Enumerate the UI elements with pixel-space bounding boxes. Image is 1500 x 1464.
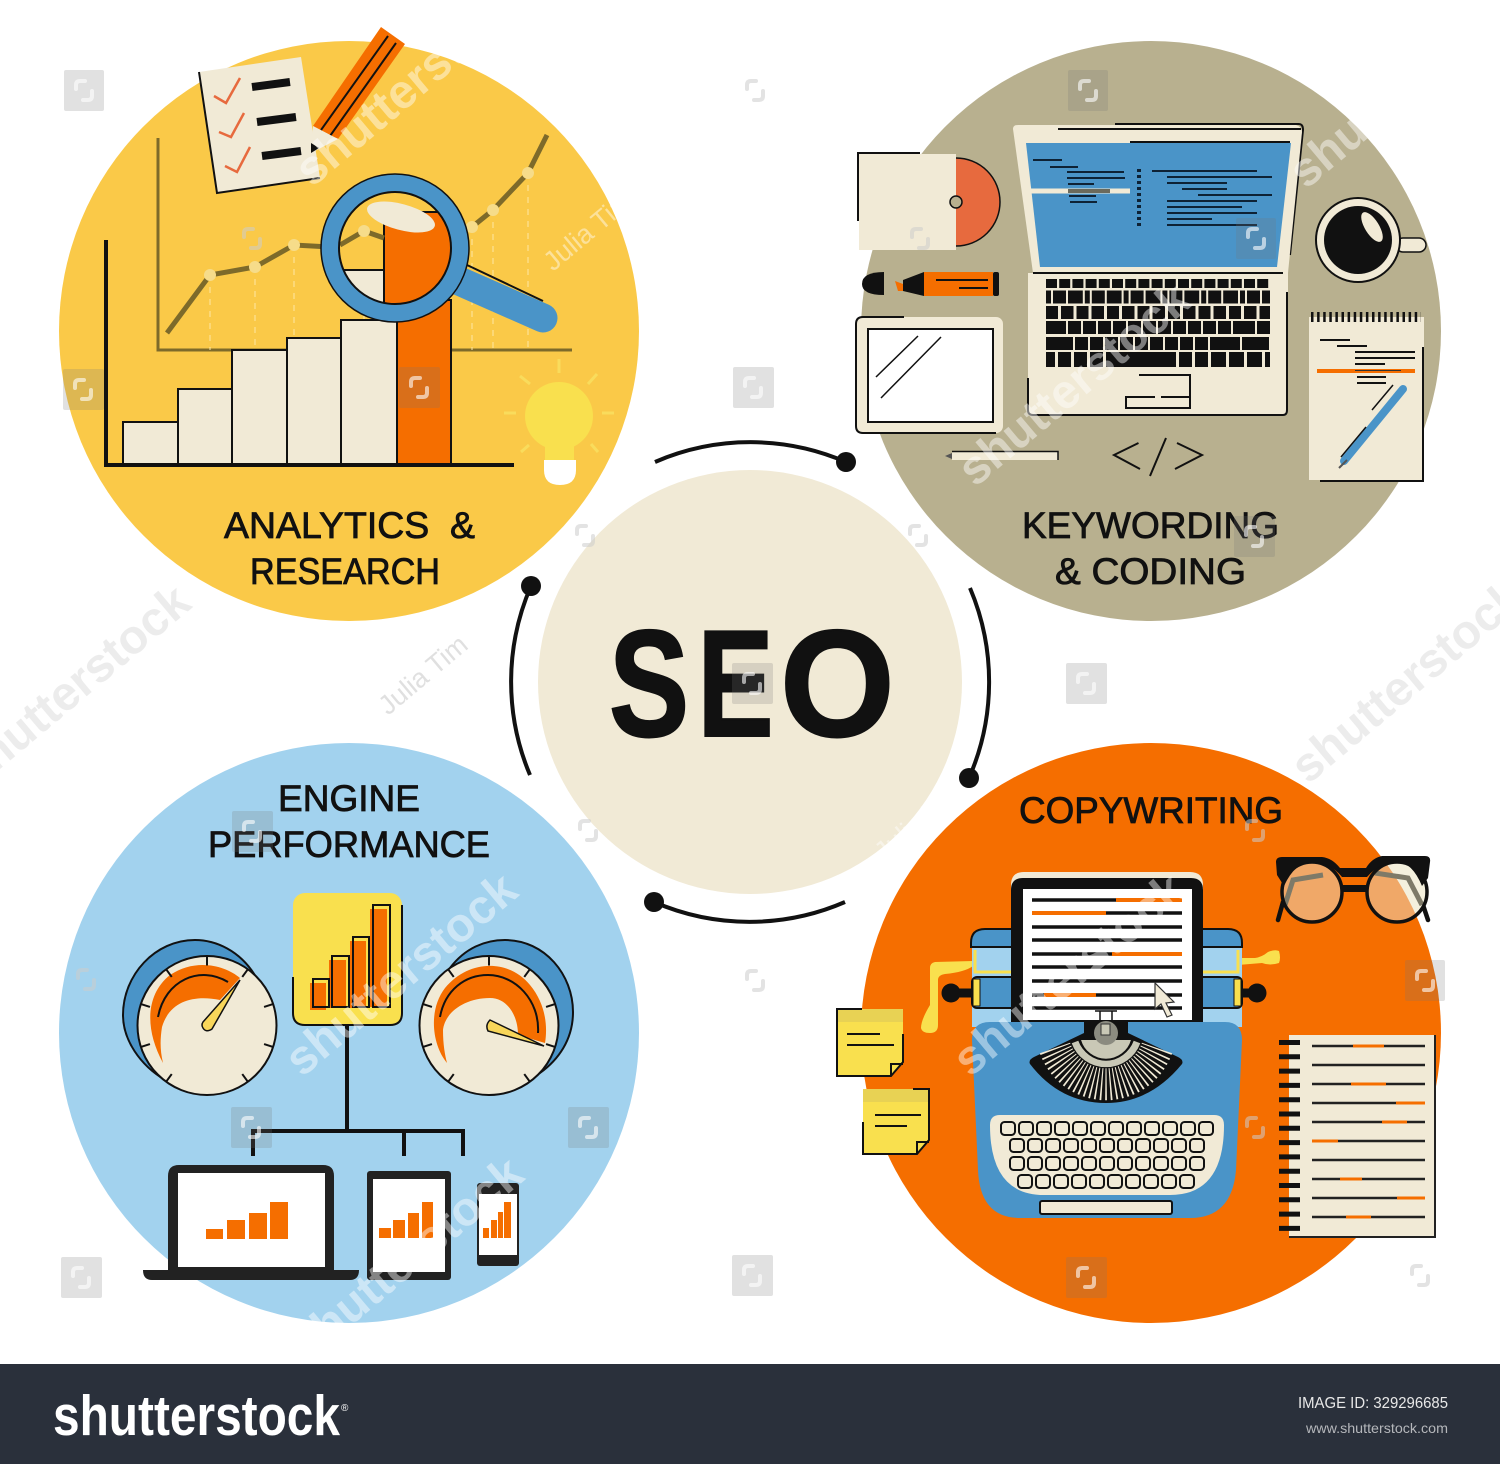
tablet <box>856 317 1003 433</box>
code symbol <box>1114 438 1202 476</box>
panel: analytics and research <box>59 27 639 621</box>
code lines <box>1030 160 1272 228</box>
footer url: www.shutterstock.com <box>1305 1420 1448 1436</box>
coffee cup <box>1316 198 1426 282</box>
tablet with bars <box>367 1171 451 1280</box>
footer logo: shutterstock <box>53 1384 340 1448</box>
watermark text: shutterstock <box>275 862 528 1086</box>
phone with bars <box>477 1183 519 1266</box>
watermark text: shutterstock <box>943 862 1196 1086</box>
notebook <box>1289 1035 1435 1237</box>
watermark text: shutterstock <box>281 1146 534 1370</box>
heading: engine performance: ENGINE <box>278 778 420 819</box>
heading: analytics and research: ANALYTICS & <box>224 505 475 546</box>
footer bar <box>0 1364 1500 1464</box>
panel: keywording and coding <box>856 41 1441 621</box>
pen <box>1339 385 1403 468</box>
keyboard <box>1046 284 1270 360</box>
notepad <box>1309 317 1424 481</box>
title <box>609 598 895 769</box>
registered mark: ® <box>341 1403 349 1414</box>
heading: engine performance: PERFORMANCE <box>208 824 490 865</box>
glasses <box>1276 856 1430 922</box>
paper sheet <box>1011 872 1203 1022</box>
laptop with bars <box>143 1165 359 1280</box>
typewriter <box>921 872 1280 1218</box>
levers <box>921 950 1280 1033</box>
heading: keywording and coding: KEYWORDING <box>1022 505 1279 546</box>
back line chart <box>158 135 572 350</box>
image id: IMAGE ID: 329296685 <box>1298 1395 1448 1412</box>
sticky note: top <box>837 1009 903 1076</box>
light bulb <box>504 359 614 485</box>
title: E <box>698 599 774 769</box>
highlighter <box>862 272 999 296</box>
gauge: right <box>420 940 573 1095</box>
center circle <box>538 470 962 894</box>
title: S <box>609 600 689 769</box>
laptop <box>1013 124 1303 415</box>
heading: keywording and coding <box>1022 505 1279 592</box>
heading: engine performance <box>208 778 490 865</box>
pencil <box>311 27 405 153</box>
magnifying glass <box>321 174 543 322</box>
gauge: left <box>123 940 276 1095</box>
watermark text: Julia Tim <box>373 629 473 721</box>
connector lines <box>253 1025 463 1156</box>
pencil <box>945 452 1058 460</box>
panel: copywriting <box>837 743 1441 1323</box>
heading: keywording and coding: & CODING <box>1055 551 1246 592</box>
CD and sleeve <box>858 153 1000 250</box>
bar chart <box>106 240 514 465</box>
typewriter keys <box>990 1115 1224 1195</box>
heading: analytics and research: RESEARCH <box>250 551 440 592</box>
chart card <box>293 893 402 1025</box>
panel: engine performance <box>59 743 639 1323</box>
watermark text: shutterstock <box>948 272 1201 496</box>
title: O <box>780 598 895 768</box>
sticky note: bottom <box>863 1089 929 1154</box>
cycle arrows <box>511 442 989 922</box>
heading: analytics and research <box>224 505 475 592</box>
checklist <box>199 57 320 193</box>
watermark text: Julia Tim <box>538 185 638 277</box>
watermark stamps <box>61 70 1445 1298</box>
space bar <box>1040 1201 1172 1214</box>
trackpad <box>1126 375 1190 408</box>
type hammers <box>1030 1021 1182 1103</box>
heading: copywriting: COPYWRITING <box>1019 790 1283 831</box>
watermark text: Julia Tim <box>869 775 969 867</box>
